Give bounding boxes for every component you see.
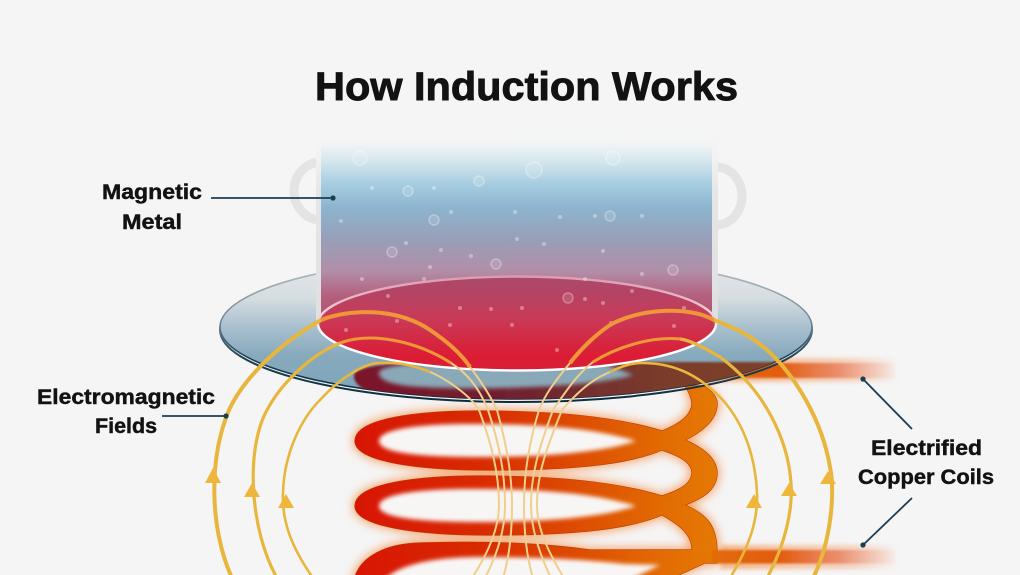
coil outline: [354, 386, 717, 575]
electromagnetic field lines: [214, 311, 832, 575]
icon: pot handles: [294, 162, 742, 225]
field lines over pot base: [321, 311, 714, 367]
label: Magnetic Metal: [102, 181, 336, 234]
left field lines: [214, 320, 430, 575]
right field lines: [610, 320, 832, 575]
coil seen through glass: [354, 362, 800, 402]
label: Electrified Copper Coils: [858, 376, 994, 548]
label: Electrified Copper Coils: Electrified: [871, 437, 982, 460]
label: Electromagnetic Fields: [37, 386, 229, 438]
label: Electromagnetic Fields: Electromagnetic: [37, 386, 215, 409]
copper coils: [354, 358, 900, 575]
coil tube: [354, 386, 717, 575]
pale central field bundles: [430, 362, 610, 575]
coil glow: [354, 386, 717, 575]
cooktop glass plate: [219, 273, 813, 403]
label: Magnetic Metal: Metal: [122, 211, 182, 234]
coil end wire: bottom: [712, 545, 900, 569]
pot base heated red: [318, 276, 716, 370]
label: Electromagnetic Fields: Fields: [95, 415, 157, 438]
coil inner openings: [379, 424, 660, 575]
field arrows: [205, 468, 836, 508]
label: Electrified Copper Coils: Copper Coils: [858, 466, 994, 489]
title: How Induction Works: [315, 65, 738, 109]
coil end wire: top: [650, 358, 900, 382]
label: Magnetic Metal: Magnetic: [102, 181, 202, 204]
bubbles: [339, 186, 686, 352]
pot: magnetic metal: [316, 135, 718, 370]
